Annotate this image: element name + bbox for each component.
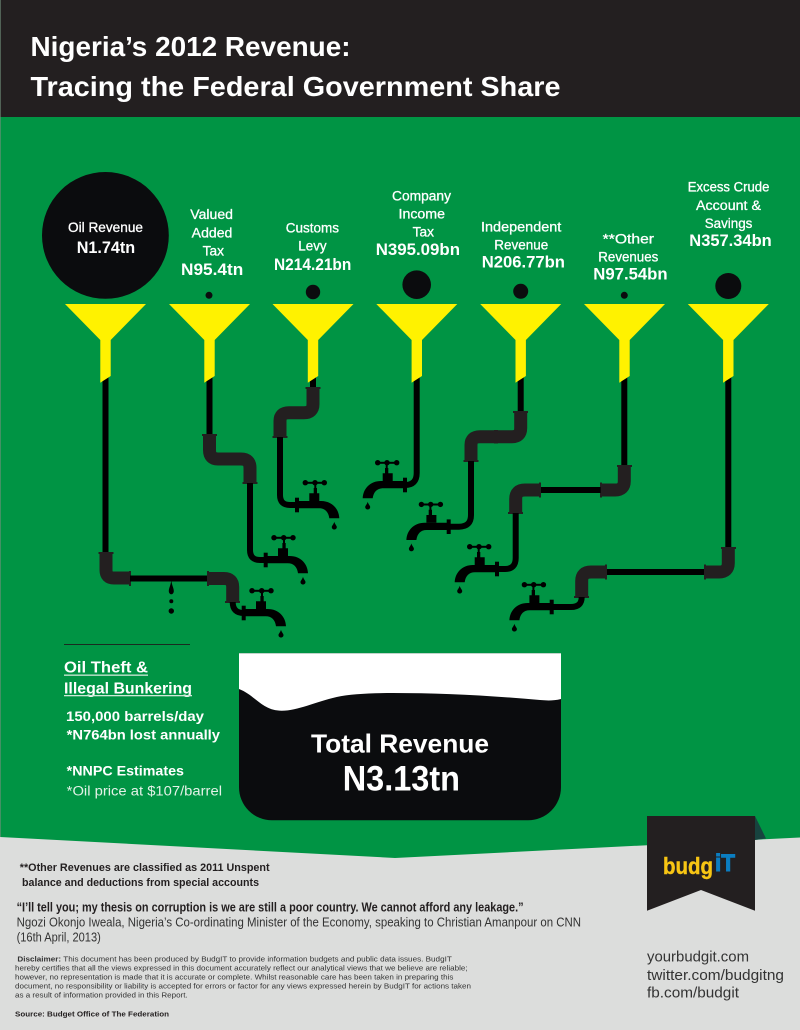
logo: budgit: budg xyxy=(663,853,713,879)
label: company income tax: Tax xyxy=(413,225,434,240)
label: independent revenue: Revenue xyxy=(494,238,548,253)
label: excess crude account: Savings xyxy=(705,216,753,231)
quote xyxy=(17,901,581,945)
label: independent revenue xyxy=(481,220,565,271)
bubble: other revenues xyxy=(621,292,628,299)
label: customs levy xyxy=(274,221,351,274)
label: customs levy: N214.21bn xyxy=(274,255,351,274)
label: excess crude account: Excess Crude xyxy=(688,180,769,195)
pipe: excess crude account xyxy=(552,376,736,607)
label: independent revenue: Independent xyxy=(481,220,562,235)
label: excess crude account xyxy=(688,180,772,250)
label: valued added tax xyxy=(181,207,243,279)
logo ribbon xyxy=(647,816,766,911)
label: total revenue: N3.13tn xyxy=(343,760,460,799)
bubble: excess crude xyxy=(715,273,741,299)
label: excess crude account: Account & xyxy=(696,198,761,213)
pipe: customs levy xyxy=(272,376,320,505)
footer panel xyxy=(0,837,800,1030)
logo: budgit xyxy=(663,850,735,879)
label: company income tax: N395.09bn xyxy=(376,240,460,259)
funnel: other revenues xyxy=(584,304,665,383)
label: total revenue xyxy=(311,729,489,799)
disclaimer: as a result of information provided in this Report. xyxy=(15,990,188,999)
pipe: independent revenue xyxy=(449,376,528,527)
oil theft figures xyxy=(66,709,221,742)
label: valued added tax: Added xyxy=(192,225,232,240)
heading: oil theft: Illegal Bunkering xyxy=(64,680,192,697)
funnel: excess crude xyxy=(688,304,769,383)
oil theft leak drops xyxy=(169,580,174,614)
label: company income tax: Income xyxy=(398,206,445,221)
title: Tracing the Federal Government Share xyxy=(30,71,560,102)
label: valued added tax: N95.4tn xyxy=(181,260,243,279)
label: customs levy: Customs xyxy=(286,221,339,236)
contact links: yourbudgit.com xyxy=(647,949,749,966)
heading: oil theft xyxy=(64,660,192,697)
note: other revenues definition xyxy=(20,862,270,889)
icon: tap other revenues xyxy=(455,544,499,594)
label: oil revenue: Oil Revenue xyxy=(68,220,143,235)
label: independent revenue: N206.77bn xyxy=(482,252,565,271)
quote: “I’ll tell you; my thesis on corruption is we are still a poor country. We cannot afford any leakage.” xyxy=(17,901,524,915)
note: other revenues definition: balance and deductions from special accounts xyxy=(22,877,259,889)
disclaimer xyxy=(15,955,471,999)
bubble: oil revenue xyxy=(42,172,169,299)
contact links xyxy=(647,949,784,1002)
bubble: customs levy xyxy=(306,285,320,299)
title xyxy=(30,31,560,102)
disclaimer: however, no representation is made that it is accurate or complete. Whilst reasonable care has been taken in preparing this xyxy=(15,973,454,982)
label: oil revenue: N1.74tn xyxy=(77,238,135,257)
green background panel xyxy=(0,117,800,862)
icon: tap company income tax xyxy=(363,460,407,510)
oil theft text block xyxy=(64,644,222,799)
icon: tap valued added tax xyxy=(264,535,308,584)
quote: Ngozi Okonjo Iweala, Nigeria’s Co-ordinating Minister of the Economy, speaking to Christian Amanpour on CNN xyxy=(17,916,581,930)
disclaimer: Disclaimer: This document has been produced by BudgIT to provide information budgets and public data issues. BudgIT xyxy=(17,955,452,964)
pipe: valued added tax xyxy=(202,376,266,560)
title banner xyxy=(0,0,800,117)
oil price note: *Oil price at $107/barrel xyxy=(67,784,222,799)
label: company income tax xyxy=(376,189,460,259)
funnel: customs levy xyxy=(272,304,354,383)
label: excess crude account: N357.34bn xyxy=(689,231,772,250)
label: other revenues: N97.54bn xyxy=(593,264,668,283)
bubble: valued added tax xyxy=(206,292,212,299)
icon: tap oil revenue xyxy=(242,588,286,638)
disclaimer: hereby certifies that all the views expressed in this document accurately reflect our analytical views that we believe are reliable; xyxy=(15,964,468,973)
label: customs levy: Levy xyxy=(298,239,327,254)
quote: (16th April, 2013) xyxy=(17,931,101,945)
funnel: oil revenue xyxy=(65,304,146,383)
oil theft figures: *N764bn lost annually xyxy=(67,727,221,742)
funnel: company income tax xyxy=(376,304,457,383)
oil price note: *NNPC Estimates xyxy=(67,764,184,779)
label: valued added tax: Tax xyxy=(203,244,224,259)
icon: tap excess crude xyxy=(509,582,554,632)
contact links: fb.com/budgit xyxy=(647,984,740,1002)
source: Source: Budget Office of The Federation xyxy=(15,1010,169,1018)
label: oil revenue xyxy=(68,220,143,257)
bubble: independent revenue xyxy=(513,284,528,299)
title: Nigeria’s 2012 Revenue: xyxy=(30,31,350,62)
icon: tap independent revenue xyxy=(406,502,451,551)
funnel: valued added tax xyxy=(169,304,250,383)
disclaimer: document, no responsibility or liability is accepted for errors or factor for any views expressed herein by BudgIT for actions taken xyxy=(15,982,471,991)
pipe: company income tax xyxy=(405,376,417,485)
tank: total revenue xyxy=(239,653,561,820)
note: other revenues definition: **Other Revenues are classified as 2011 Unspent xyxy=(20,862,270,874)
label: valued added tax: Valued xyxy=(190,207,233,222)
label: total revenue: Total Revenue xyxy=(311,729,489,759)
oil price note xyxy=(67,764,222,799)
heading: oil theft: Oil Theft & xyxy=(64,660,148,677)
oil theft figures: 150,000 barrels/day xyxy=(66,709,205,724)
pipe: other revenues xyxy=(497,376,632,569)
label: company income tax: Company xyxy=(392,189,451,204)
label: other revenues xyxy=(593,231,668,283)
label: other revenues: **Other xyxy=(603,231,655,246)
funnel: independent revenue xyxy=(480,304,561,383)
bubble: company income tax xyxy=(402,270,431,299)
label: other revenues: Revenues xyxy=(598,249,659,264)
logo: budgit: iT xyxy=(715,850,735,877)
icon: tap customs levy xyxy=(295,480,339,530)
pipe: oil revenue xyxy=(98,376,244,613)
contact links: twitter.com/budgitng xyxy=(647,967,784,984)
